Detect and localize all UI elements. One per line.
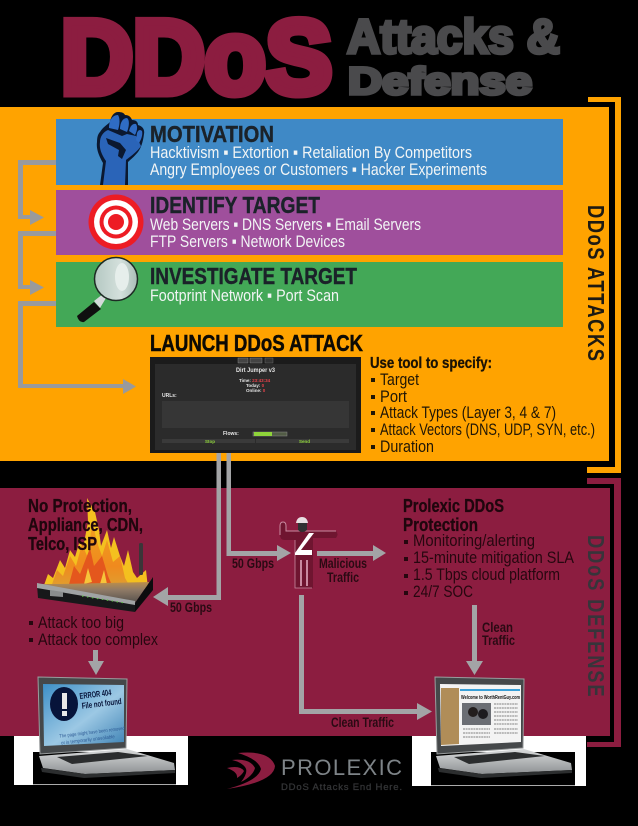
text: investigate list: Footprint Network ▪ Port Scan xyxy=(150,286,339,305)
label: ddos defense: DDoS DEFENSE xyxy=(582,535,608,697)
icon: fist xyxy=(97,112,144,185)
title: Attacks & Defense: Attacks & xyxy=(347,11,560,64)
title: Attacks & Defense xyxy=(347,11,560,103)
screenshot: dirt jumper tool: Online: 0 xyxy=(246,388,266,393)
text: use tool to specify xyxy=(370,355,595,456)
error text: The page might have been removed xyxy=(59,726,125,740)
text: attack failures: Attack too big xyxy=(38,613,124,632)
sash xyxy=(295,533,314,555)
text: no protection heading: Telco, ISP xyxy=(28,534,97,554)
text: no protection heading xyxy=(28,496,143,554)
arrow: 50 Gbps to appliance xyxy=(153,453,221,606)
error text: File not found xyxy=(81,696,122,711)
screen xyxy=(43,684,124,746)
label: 50 Gbps centre: 50 Gbps xyxy=(232,556,274,571)
screenshot: dirt jumper tool: URLs: xyxy=(162,393,177,399)
icon: magnifier xyxy=(77,258,138,322)
text: use tool to specify: Attack Types (Layer 3, 4 & 7) xyxy=(380,403,556,422)
panel: defense background xyxy=(0,488,610,736)
text: prolexic protection: 24/7 SOC xyxy=(413,582,473,601)
flow arrow: identify to investigate xyxy=(18,231,56,295)
label: clean traffic right xyxy=(482,620,515,648)
title: Attacks & Defense: Defense xyxy=(348,61,532,103)
panel: motivation xyxy=(56,112,563,185)
title xyxy=(61,0,560,116)
text: no protection heading: Appliance, CDN, xyxy=(28,515,143,535)
label: 50 Gbps left: 50 Gbps xyxy=(170,600,212,615)
text: prolexic protection: 1.5 Tbps cloud platform xyxy=(413,565,560,584)
screenshot: dirt jumper tool: Flows: xyxy=(223,431,239,437)
white stand: right xyxy=(412,736,586,786)
bracket: attacks xyxy=(587,97,621,473)
lid xyxy=(435,677,524,754)
base xyxy=(39,749,175,774)
icon: laptop with website: Welcome to WorthRentGuy.com xyxy=(461,695,520,701)
flow arrow: motivation to identify xyxy=(18,160,56,225)
wordmark: PROLEXIC xyxy=(281,755,402,780)
screenshot: dirt jumper tool: Time: 23:43:34 xyxy=(239,378,271,383)
arrow: attack to error xyxy=(88,650,104,675)
heading: motivation: MOTIVATION xyxy=(150,121,274,147)
text: prolexic protection: 15-minute mitigation SLA xyxy=(413,548,575,567)
label: clean traffic right: Clean xyxy=(482,620,513,635)
arrow: malicious traffic xyxy=(317,545,386,561)
screenshot: dirt jumper tool: Stop xyxy=(205,439,215,444)
flames xyxy=(43,498,148,598)
screenshot: dirt jumper tool: Today: 0 xyxy=(246,383,265,388)
tagline: DDoS Attacks End Here. xyxy=(281,782,402,793)
error text: ERROR 404 xyxy=(79,687,112,701)
icon: laptop with error xyxy=(38,677,175,778)
text: attack failures xyxy=(29,613,158,649)
stand line: left xyxy=(33,784,176,785)
arrow: clean traffic from protection xyxy=(466,605,483,675)
text: use tool to specify: Port xyxy=(380,387,407,406)
text: motivation list: Angry Employees or Customers ▪ Hacker Experiments xyxy=(150,160,487,179)
label: clean traffic bottom: Clean Traffic xyxy=(331,715,394,730)
swirl mark xyxy=(227,753,275,789)
heading: launch ddos attack: LAUNCH DDoS ATTACK xyxy=(150,330,363,356)
label: malicious traffic: Traffic xyxy=(327,570,359,585)
panel: investigate target xyxy=(56,258,563,327)
text: prolexic protection: Monitoring/alerting xyxy=(413,531,535,550)
text: attack failures: Attack too complex xyxy=(38,630,158,649)
router front xyxy=(37,585,135,612)
bracket: defense xyxy=(587,478,621,747)
arrow: 50 Gbps to scrubber xyxy=(226,453,291,561)
head xyxy=(296,517,308,523)
heading: identify target: IDENTIFY TARGET xyxy=(150,192,320,218)
icon: traffic officer xyxy=(280,517,338,588)
lid xyxy=(38,677,127,754)
base xyxy=(436,749,572,774)
panel: identify target xyxy=(56,190,563,255)
text: identify list: Web Servers ▪ DNS Servers ▪ Email Servers xyxy=(150,215,421,234)
icon: flaming router xyxy=(37,498,153,612)
flow arrow: investigate to launch xyxy=(18,301,136,394)
error text xyxy=(54,686,126,747)
logo: prolexic xyxy=(227,753,402,793)
text: identify list xyxy=(150,215,421,251)
error icon xyxy=(50,687,78,721)
panel: attacks background xyxy=(0,107,609,461)
stand line: right xyxy=(431,785,575,786)
legs xyxy=(300,560,308,586)
label: malicious traffic: Malicious xyxy=(319,556,367,571)
text: motivation list xyxy=(150,143,487,179)
screenshot: dirt jumper tool xyxy=(150,357,361,453)
text: no protection heading: No Protection, xyxy=(28,496,132,516)
white stand: left xyxy=(14,736,188,785)
text: prolexic protection: Protection xyxy=(403,515,478,535)
title: DDoS: DDoS xyxy=(61,0,332,116)
router top xyxy=(37,577,153,603)
screenshot: dirt jumper tool: Dirt Jumper v3 xyxy=(236,368,276,374)
text: use tool to specify: Target xyxy=(380,370,419,389)
text: use tool to specify: Duration xyxy=(380,437,434,456)
text: identify list: FTP Servers ▪ Network Devices xyxy=(150,232,345,251)
arrow: clean traffic from scrubber xyxy=(299,595,432,720)
label: ddos attacks: DDoS ATTACKS xyxy=(582,205,608,361)
icon: target xyxy=(88,194,144,250)
text: motivation list: Hacktivism ▪ Extortion ▪ Retaliation By Competitors xyxy=(150,143,472,162)
heading: investigate target: INVESTIGATE TARGET xyxy=(150,263,357,289)
error text: or is temporarily unavailable xyxy=(61,734,115,747)
label: clean traffic right: Traffic xyxy=(482,633,515,648)
label: malicious traffic xyxy=(319,556,367,585)
arms and body xyxy=(280,522,338,588)
antenna xyxy=(139,543,143,575)
text: use tool to specify: Use tool to specify: xyxy=(370,355,492,372)
text: prolexic protection xyxy=(403,496,575,601)
icon: laptop with website xyxy=(435,677,572,778)
screenshot: dirt jumper tool: Send xyxy=(299,439,310,444)
text: prolexic protection: Prolexic DDoS xyxy=(403,496,504,516)
website xyxy=(440,684,521,746)
